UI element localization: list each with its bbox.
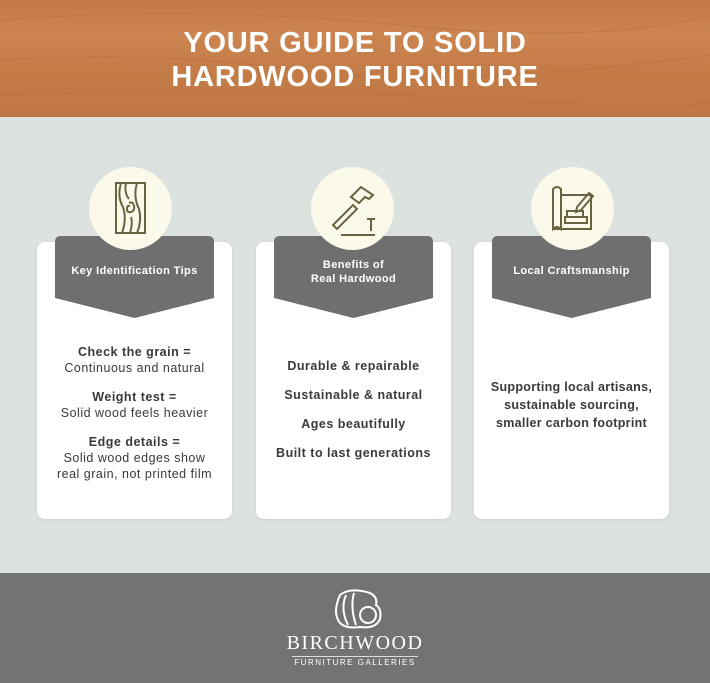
text: benefits list: Ages beautifully (301, 417, 406, 431)
text: craftsmanship: sustainable sourcing, (504, 398, 639, 412)
title (171, 27, 539, 93)
text: identification tips: Solid wood feels heavier (61, 406, 208, 420)
text: identification tips (57, 345, 212, 481)
text: craftsmanship: Supporting local artisans, (491, 380, 652, 394)
panel: benefits (256, 242, 451, 519)
text: craftsmanship: smaller carbon footprint (496, 416, 647, 430)
text: identification tips: Continuous and natural (64, 361, 205, 375)
logo: Birchwood: FURNITURE GALLERIES (294, 658, 416, 667)
title: YOUR GUIDE TO SOLID (183, 27, 527, 59)
panel: local craftsmanship (474, 242, 669, 519)
text: benefits list: Durable & repairable (287, 359, 420, 373)
text: identification tips: Edge details = (89, 435, 180, 449)
logo: Birchwood: BIRCHWOOD (287, 632, 423, 654)
text: identification tips: real grain, not printed film (57, 467, 212, 481)
banner: local craftsmanship (492, 236, 651, 318)
footer (0, 573, 710, 683)
icon: hammer (311, 167, 394, 250)
icon: wood grain (89, 167, 172, 250)
text: benefits list: Built to last generations (276, 446, 431, 460)
banner title: benefits: Real Hardwood (311, 273, 396, 285)
text: benefits list (276, 359, 431, 460)
title: HARDWOOD FURNITURE (171, 61, 539, 93)
banner title: benefits: Benefits of (323, 259, 384, 271)
text: benefits list: Sustainable & natural (284, 388, 423, 402)
text: craftsmanship (491, 380, 652, 430)
header: wood banner (0, 0, 710, 117)
text: identification tips: Solid wood edges show (64, 451, 205, 465)
banner title: key identification tips: Key Identification Tips (71, 265, 198, 277)
banner: key identification tips (55, 236, 214, 318)
text: identification tips: Weight test = (92, 390, 177, 404)
banner title: local craftsmanship: Local Craftsmanship (513, 265, 630, 277)
panel: key identification tips (37, 242, 232, 519)
banner: benefits (274, 236, 433, 318)
logo: Birchwood (287, 589, 423, 667)
icon: log (335, 589, 382, 628)
icon: blueprint with pencil (531, 167, 614, 250)
banner title: benefits (311, 259, 396, 285)
text: identification tips: Check the grain = (78, 345, 191, 359)
